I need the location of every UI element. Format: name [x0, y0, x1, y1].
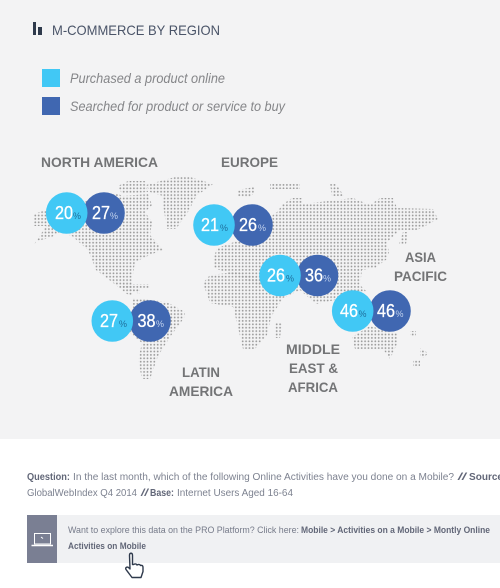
label: Latin America: AMERICA: [169, 383, 233, 399]
Arctic Canada: [118, 181, 148, 194]
source note: In the last month, which of the following Online Activities have you done on a Mobile?: [73, 472, 454, 483]
label: Middle East and Africa: [286, 341, 340, 395]
bubbles: North America: 27: [92, 203, 110, 223]
source note: [27, 472, 500, 499]
bubbles: Asia Pacific: 46: [377, 301, 395, 321]
Eurasia: [214, 198, 438, 304]
label: Asia Pacific: [394, 249, 447, 284]
Africa: [203, 272, 283, 349]
callout: PRO platform: Want to explore this data on the PRO Platform? Click here:: [68, 525, 299, 535]
bubbles: Europe: 26: [239, 215, 257, 235]
bubbles: Asia Pacific: [332, 290, 411, 332]
label: Middle East and Africa: AFRICA: [288, 379, 338, 395]
bubbles: Latin America: 27: [100, 311, 118, 331]
Australia and Indonesia: [352, 326, 398, 359]
Arctic islands: [237, 187, 255, 197]
Greenland: [146, 177, 213, 229]
bubbles: Middle East and Africa: 26: [267, 266, 285, 286]
label: Middle East and Africa: MIDDLE: [286, 341, 340, 357]
bubbles: Latin America: %: [119, 319, 127, 329]
North America: [34, 193, 163, 296]
Japan: [399, 232, 408, 244]
bubbles: Middle East and Africa: 36: [305, 266, 323, 286]
legend: Searched for product or service to buy: [70, 98, 286, 114]
source note: GlobalWebIndex Q4 2014: [27, 488, 137, 499]
bubbles: North America: %: [110, 211, 118, 221]
source note: Question:: [27, 472, 70, 483]
label: Latin America: [169, 364, 233, 399]
label: Middle East and Africa: EAST &: [289, 360, 338, 376]
bubbles: North America: [46, 192, 125, 234]
bubbles: North America: 20: [55, 203, 73, 223]
bubbles: Europe: [193, 204, 273, 246]
bubbles: Middle East and Africa: [259, 255, 338, 296]
bubbles: North America: %: [73, 211, 81, 221]
callout: PRO platform: [27, 515, 500, 563]
label: Asia Pacific: ASIA: [405, 249, 436, 265]
icon: hand cursor: [126, 553, 143, 578]
label: Latin America: LATIN: [182, 364, 220, 380]
bubbles: Europe: 21: [201, 215, 219, 235]
bubbles: Latin America: [92, 300, 171, 342]
label: Europe: EUROPE: [221, 154, 278, 170]
bubbles: Asia Pacific: %: [396, 309, 404, 319]
bubbles: Asia Pacific: 46: [340, 301, 358, 321]
panel: chart background: [0, 0, 500, 439]
label: North America: NORTH AMERICA: [41, 154, 158, 170]
bubbles: Europe: %: [258, 223, 266, 233]
South America: [130, 298, 185, 379]
heading icon: bars: [33, 22, 42, 35]
bubbles: Middle East and Africa: %: [323, 274, 331, 284]
bubbles: Europe: %: [220, 223, 228, 233]
source note: //: [140, 488, 150, 499]
icon: laptop: [32, 534, 53, 546]
bubbles: Latin America: %: [156, 319, 164, 329]
heading: M-COMMERCE BY REGION: [52, 22, 220, 38]
source note: Internet Users Aged 16-64: [177, 488, 293, 499]
label: Asia Pacific: PACIFIC: [394, 268, 447, 284]
Caribbean: [123, 284, 150, 294]
Madagascar: [275, 323, 282, 338]
bubbles: Latin America: 38: [138, 311, 156, 331]
legend: Purchased a product online: [70, 70, 225, 86]
source note: Base:: [150, 488, 174, 499]
source note: //: [457, 472, 468, 483]
callout: PRO platform: Activities on Mobile: [68, 541, 146, 551]
bubbles: Middle East and Africa: %: [286, 274, 294, 284]
bubbles: Asia Pacific: %: [358, 309, 366, 319]
legend: [42, 69, 286, 115]
dotted world map: [34, 177, 438, 379]
